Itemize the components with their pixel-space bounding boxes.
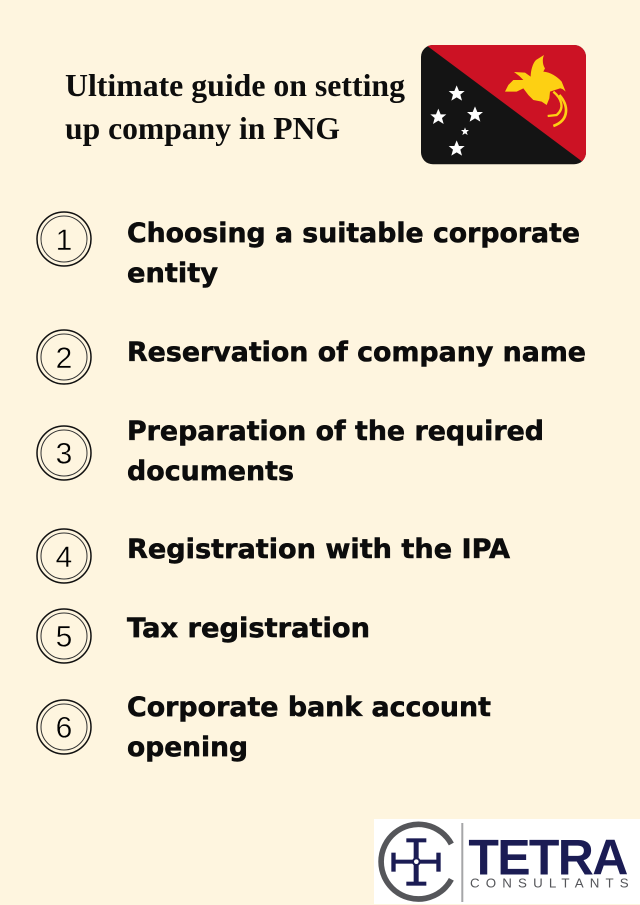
number badge 4	[37, 529, 91, 583]
number badge 2	[37, 330, 91, 384]
logo wordmark: CONSULTANTS	[470, 876, 629, 891]
number badge 1	[37, 212, 91, 266]
number badge 5	[37, 609, 91, 663]
step 1	[37, 212, 580, 289]
step 4 text: Registration with the IPA	[127, 534, 510, 565]
number badge 3	[37, 426, 91, 480]
step 1 text: Choosing a suitable corporate	[127, 218, 580, 249]
step 6 text: opening	[127, 732, 248, 763]
step 6 text	[127, 692, 491, 763]
step 3	[37, 416, 544, 487]
logo wordmark: TETRA	[468, 829, 628, 885]
number badge 6: 6	[56, 712, 72, 744]
title: Ultimate guide on setting	[65, 67, 405, 103]
number badge 3: 3	[56, 438, 72, 470]
logo emblem	[381, 824, 451, 899]
number badge 2: 2	[56, 342, 72, 375]
step 3 text	[127, 416, 544, 487]
number badge 6	[37, 700, 91, 754]
icon: Papua New Guinea flag	[421, 45, 586, 164]
number badge 4: 4	[56, 541, 72, 574]
number badge 1: 1	[56, 224, 72, 257]
step 3 text: documents	[127, 456, 294, 487]
title	[65, 67, 405, 146]
logo divider	[461, 823, 463, 902]
step 2 text: Reservation of company name	[127, 337, 586, 368]
step 2	[37, 330, 586, 384]
step 4	[37, 529, 510, 583]
step 1 text	[127, 218, 580, 289]
step 6	[37, 692, 491, 763]
step 5 text: Tax registration	[127, 613, 370, 644]
number badge 5: 5	[56, 620, 72, 654]
step 5	[37, 609, 370, 663]
step 6 text: Corporate bank account	[127, 692, 491, 723]
title: up company in PNG	[65, 110, 340, 146]
logo: Tetra Consultants	[374, 819, 640, 904]
step 3 text: Preparation of the required	[127, 416, 544, 447]
step 1 text: entity	[127, 258, 218, 289]
